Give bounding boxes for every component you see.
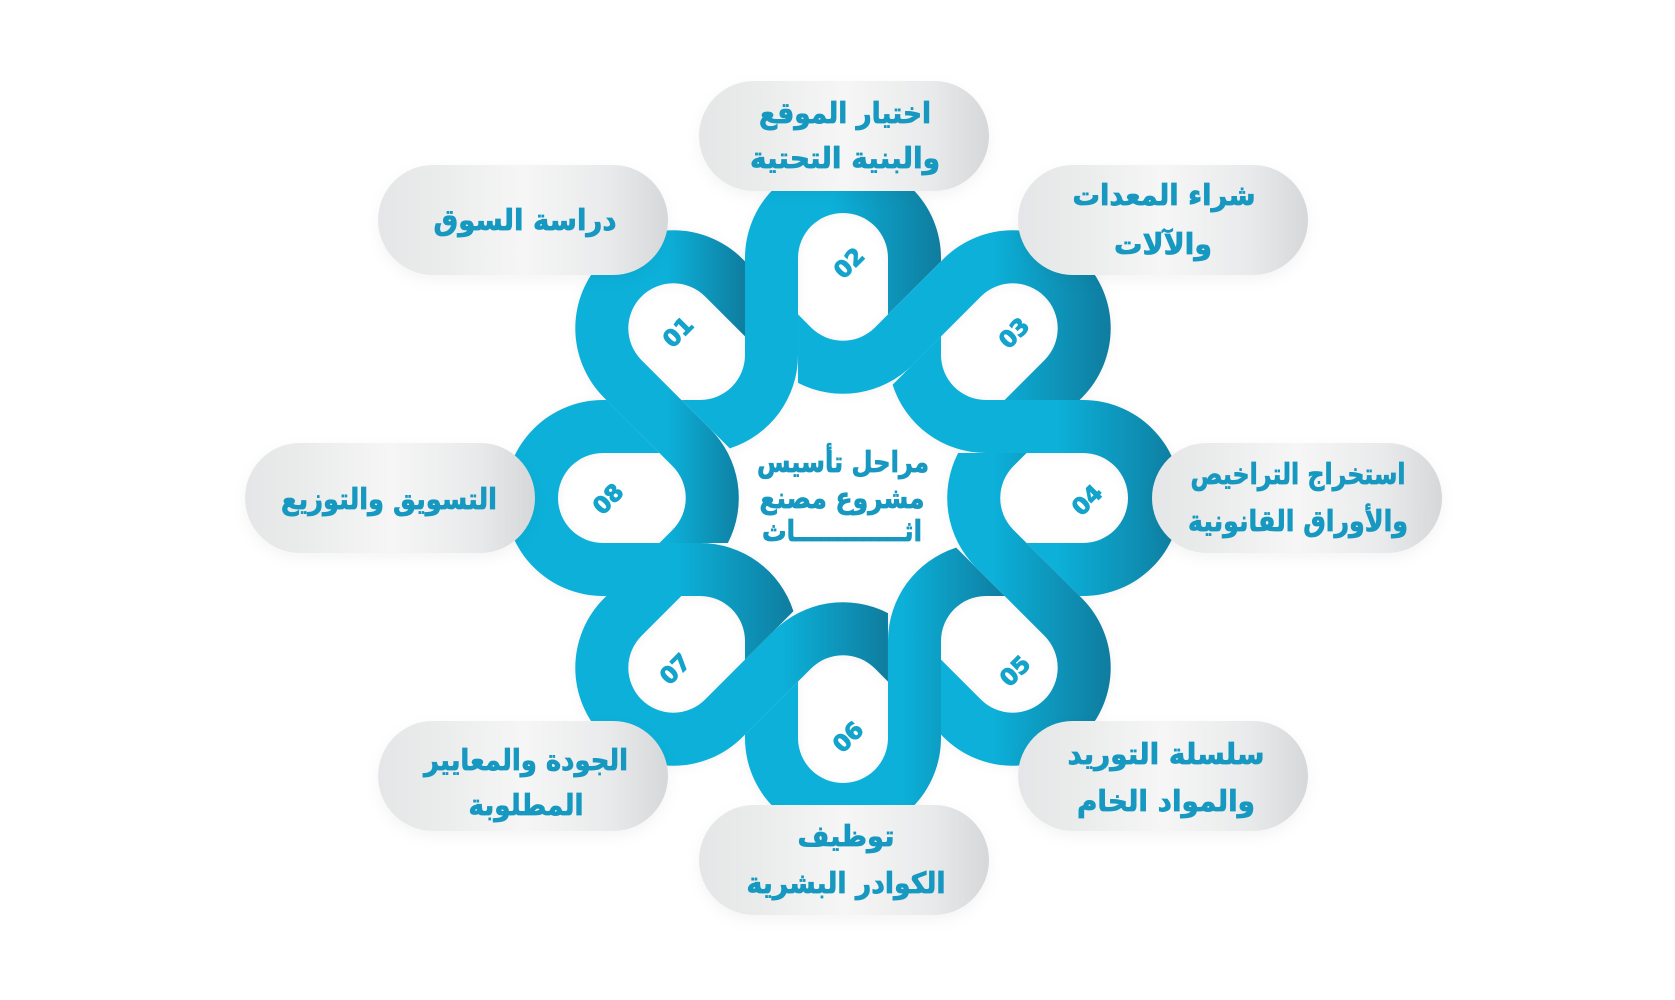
number 08: 08 — [588, 479, 629, 520]
interlaced ring of eight ribbons — [490, 145, 1196, 851]
pill 04: licences and legal papers — [1152, 443, 1442, 553]
pill 01: market study: دراسة السوق — [434, 203, 616, 237]
number 04: 04 — [1067, 480, 1108, 521]
pill 04: licences and legal papers: استخراج التراخيص — [1190, 457, 1406, 491]
pill 01: market study — [378, 165, 668, 275]
center title: اثـــــــــــــاث — [762, 514, 922, 548]
pill 07: quality and standards: الجودة والمعايير — [422, 743, 628, 777]
center title: مراحل تأسيس — [757, 443, 929, 479]
pill 08: marketing and distribution: التسويق والتوزيع — [281, 482, 497, 516]
ribbon 05 — [809, 419, 1196, 806]
number 05: 05 — [995, 651, 1036, 692]
pill 06: hiring staff: الكوادر البشرية — [746, 866, 946, 900]
pill 05: supply chain and raw materials — [1018, 721, 1308, 831]
pill 07: quality and standards — [378, 721, 668, 831]
number 06: 06 — [828, 717, 869, 758]
ribbon 07 — [535, 464, 922, 851]
ribbon 01 — [490, 190, 877, 577]
pill 06: hiring staff — [699, 805, 989, 915]
pill 05: supply chain and raw materials: والمواد الخام — [1077, 784, 1255, 818]
pill 04: licences and legal papers: والأوراق القانونية — [1188, 503, 1408, 538]
number 07: 07 — [655, 649, 696, 690]
pill 08: marketing and distribution — [245, 443, 535, 553]
pill 03: equipment and machines: والآلات — [1114, 227, 1212, 261]
step numbers — [588, 243, 1108, 758]
pill 02: site and infrastructure — [699, 81, 989, 191]
ribbon 04 — [893, 336, 1181, 596]
center title: مشروع مصنع — [760, 481, 924, 515]
number 01: 01 — [658, 312, 699, 353]
ribbon 06 — [745, 548, 1005, 836]
pill 06: hiring staff: توظيف — [798, 819, 894, 853]
pill 05: supply chain and raw materials: سلسلة التوريد — [1068, 737, 1264, 771]
ribbon 02 — [681, 160, 941, 448]
pill 02: site and infrastructure: اختيار الموقع — [759, 96, 931, 130]
ribbon 03 — [764, 145, 1151, 532]
pill 03: equipment and machines: شراء المعدات — [1072, 178, 1256, 212]
number 03: 03 — [994, 313, 1035, 354]
center title — [757, 443, 929, 548]
pill 03: equipment and machines — [1018, 165, 1308, 275]
number 02: 02 — [829, 243, 870, 284]
pill 02: site and infrastructure: والبنية التحتية — [750, 141, 940, 175]
pill 07: quality and standards: المطلوبة — [468, 788, 584, 822]
ribbon 08 — [505, 400, 793, 660]
